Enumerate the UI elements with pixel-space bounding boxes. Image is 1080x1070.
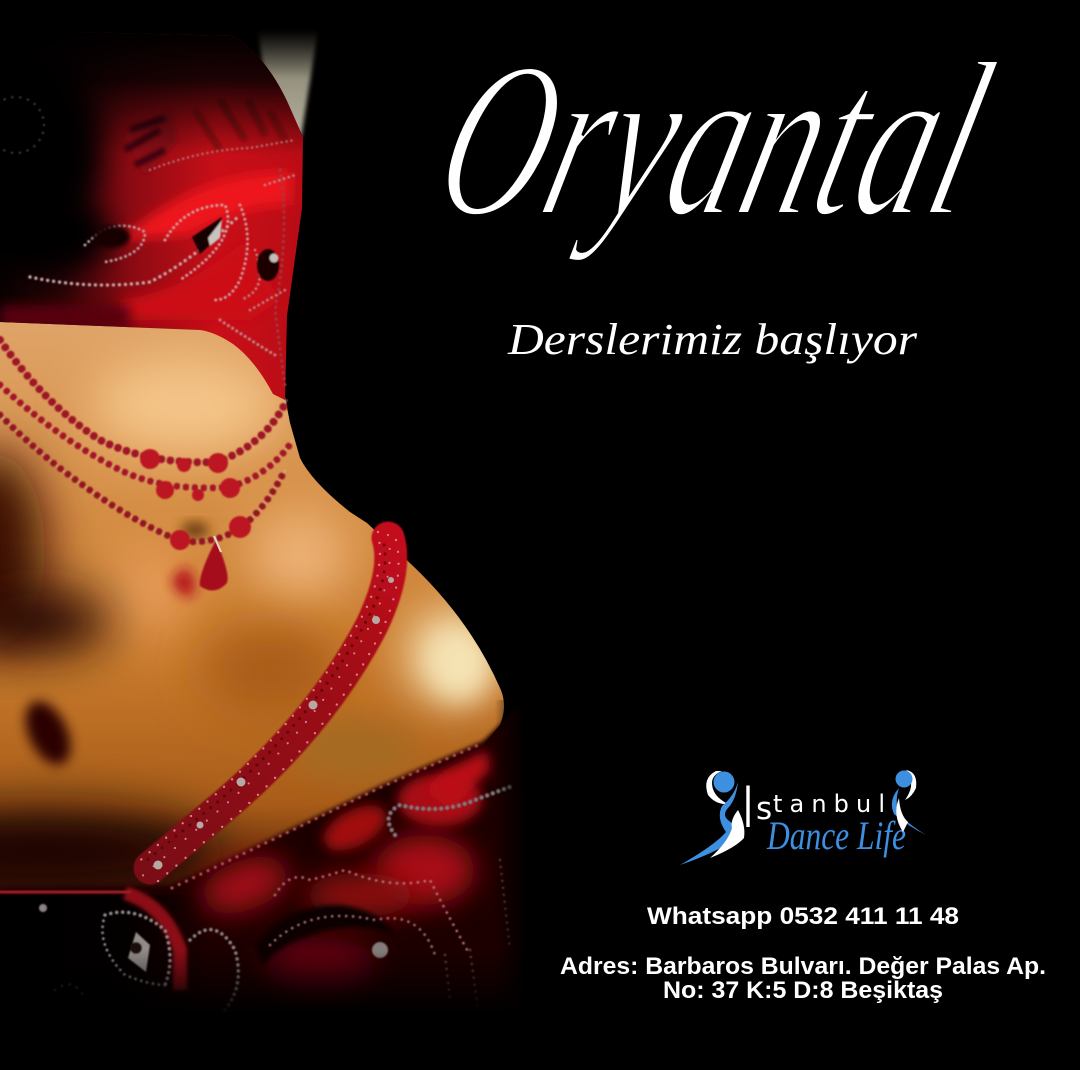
contact: whatsapp: Whatsapp 0532 411 11 48 [647, 903, 959, 930]
logo: Istanbul Dance Life [680, 770, 926, 865]
torso skin [0, 300, 520, 900]
title: Oryantal: Oryantal [415, 16, 1014, 262]
pale backdrop behind shoulder [258, 30, 318, 138]
logo wordmark: Dance Life: Dance Life [766, 813, 906, 858]
navel [16, 694, 80, 772]
icon: left dancer figure [680, 771, 744, 865]
logo wordmark: Istanbul [743, 774, 885, 840]
costume top bead embroidery [0, 97, 295, 385]
jewels on costume top [94, 217, 279, 281]
necklace drop pendant [172, 536, 228, 598]
beaded necklace [0, 340, 293, 550]
neck shadow [181, 522, 209, 538]
belt strap [135, 532, 399, 888]
logo wordmark: Istanbul: tanbul [773, 790, 885, 818]
photo: dancer in red beaded costume [0, 30, 560, 1070]
skirt bead embroidery [0, 743, 515, 1010]
photo edge fades [0, 950, 560, 1015]
contact: address: Adres: Barbaros Bulvarı. Değer Palas Ap. [560, 953, 1046, 980]
logo wordmark: Istanbul: s [756, 791, 772, 827]
costume top [0, 30, 310, 400]
logo wordmark: Istanbul: I [743, 774, 753, 840]
skirt [0, 705, 525, 1025]
icon: right dancer figure [892, 770, 926, 835]
contact: address: No: 37 K:5 D:8 Beşiktaş [663, 977, 943, 1004]
subtitle: Derslerimiz başlıyor [507, 315, 918, 364]
contact: address [560, 953, 1046, 1004]
